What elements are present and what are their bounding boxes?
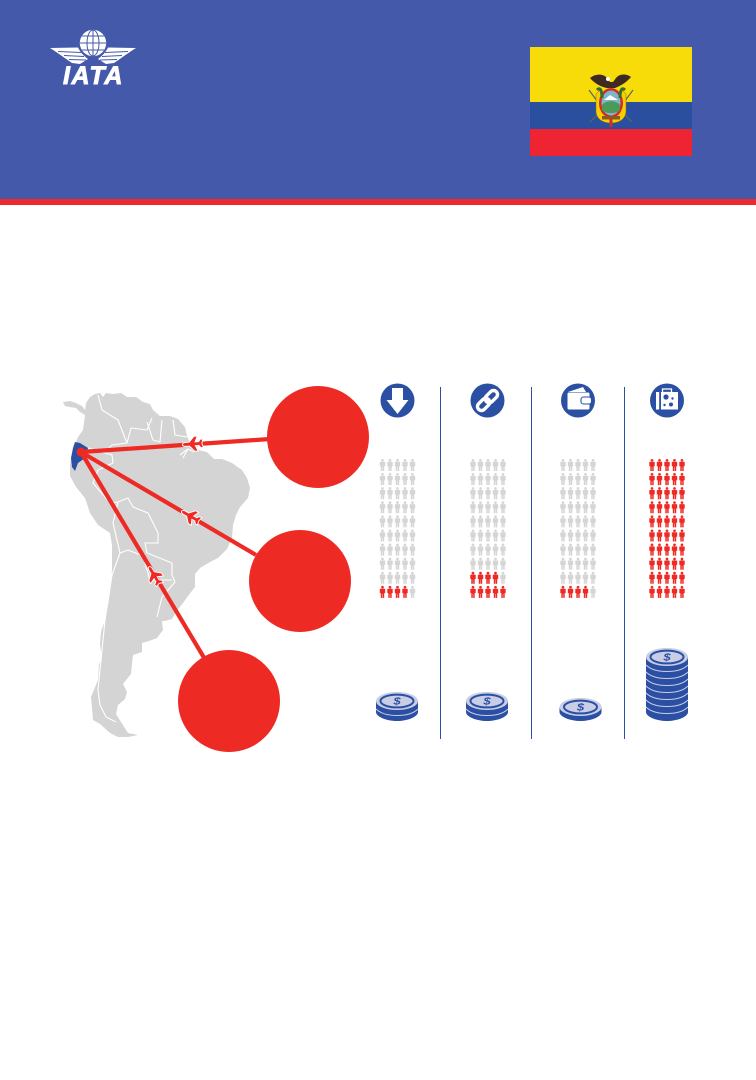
people chart: column four (649, 459, 685, 598)
coin stack: column three (560, 698, 602, 721)
header band (0, 0, 756, 199)
country borders (88, 395, 194, 722)
people chart: column two (470, 459, 506, 598)
icon: down arrow (380, 384, 414, 418)
plane icon: route one (182, 436, 203, 452)
people chart: column three (560, 459, 596, 598)
highlighted people (560, 586, 596, 598)
highlighted people (380, 586, 415, 598)
Ecuador highlighted (71, 442, 88, 471)
destination circle two (249, 530, 351, 632)
icon: wallet (561, 384, 595, 418)
people chart: column one (380, 459, 415, 598)
destination circle three (178, 650, 280, 752)
icon: suitcase (650, 384, 684, 418)
coin stack: column one (376, 692, 418, 721)
icon: chain link (470, 384, 504, 418)
flag of Ecuador (530, 47, 692, 156)
header red rule (0, 199, 756, 205)
route lines from Ecuador (81, 439, 270, 661)
coin stack: column two (466, 692, 508, 721)
origin marker (76, 448, 86, 456)
logo globe (80, 30, 106, 56)
continent landmass (63, 393, 250, 737)
plane icon: route two (179, 505, 203, 527)
destination circle one (267, 386, 369, 488)
IATA logo (50, 30, 136, 90)
logo wings (50, 48, 136, 64)
coin stack: column four (646, 648, 688, 721)
highlighted people (470, 572, 506, 598)
logo wordmark: IATA (63, 62, 124, 90)
column dividers (440, 387, 624, 739)
map of South America (63, 393, 250, 737)
coat of arms (589, 74, 633, 127)
plane icon: route three (143, 564, 165, 588)
